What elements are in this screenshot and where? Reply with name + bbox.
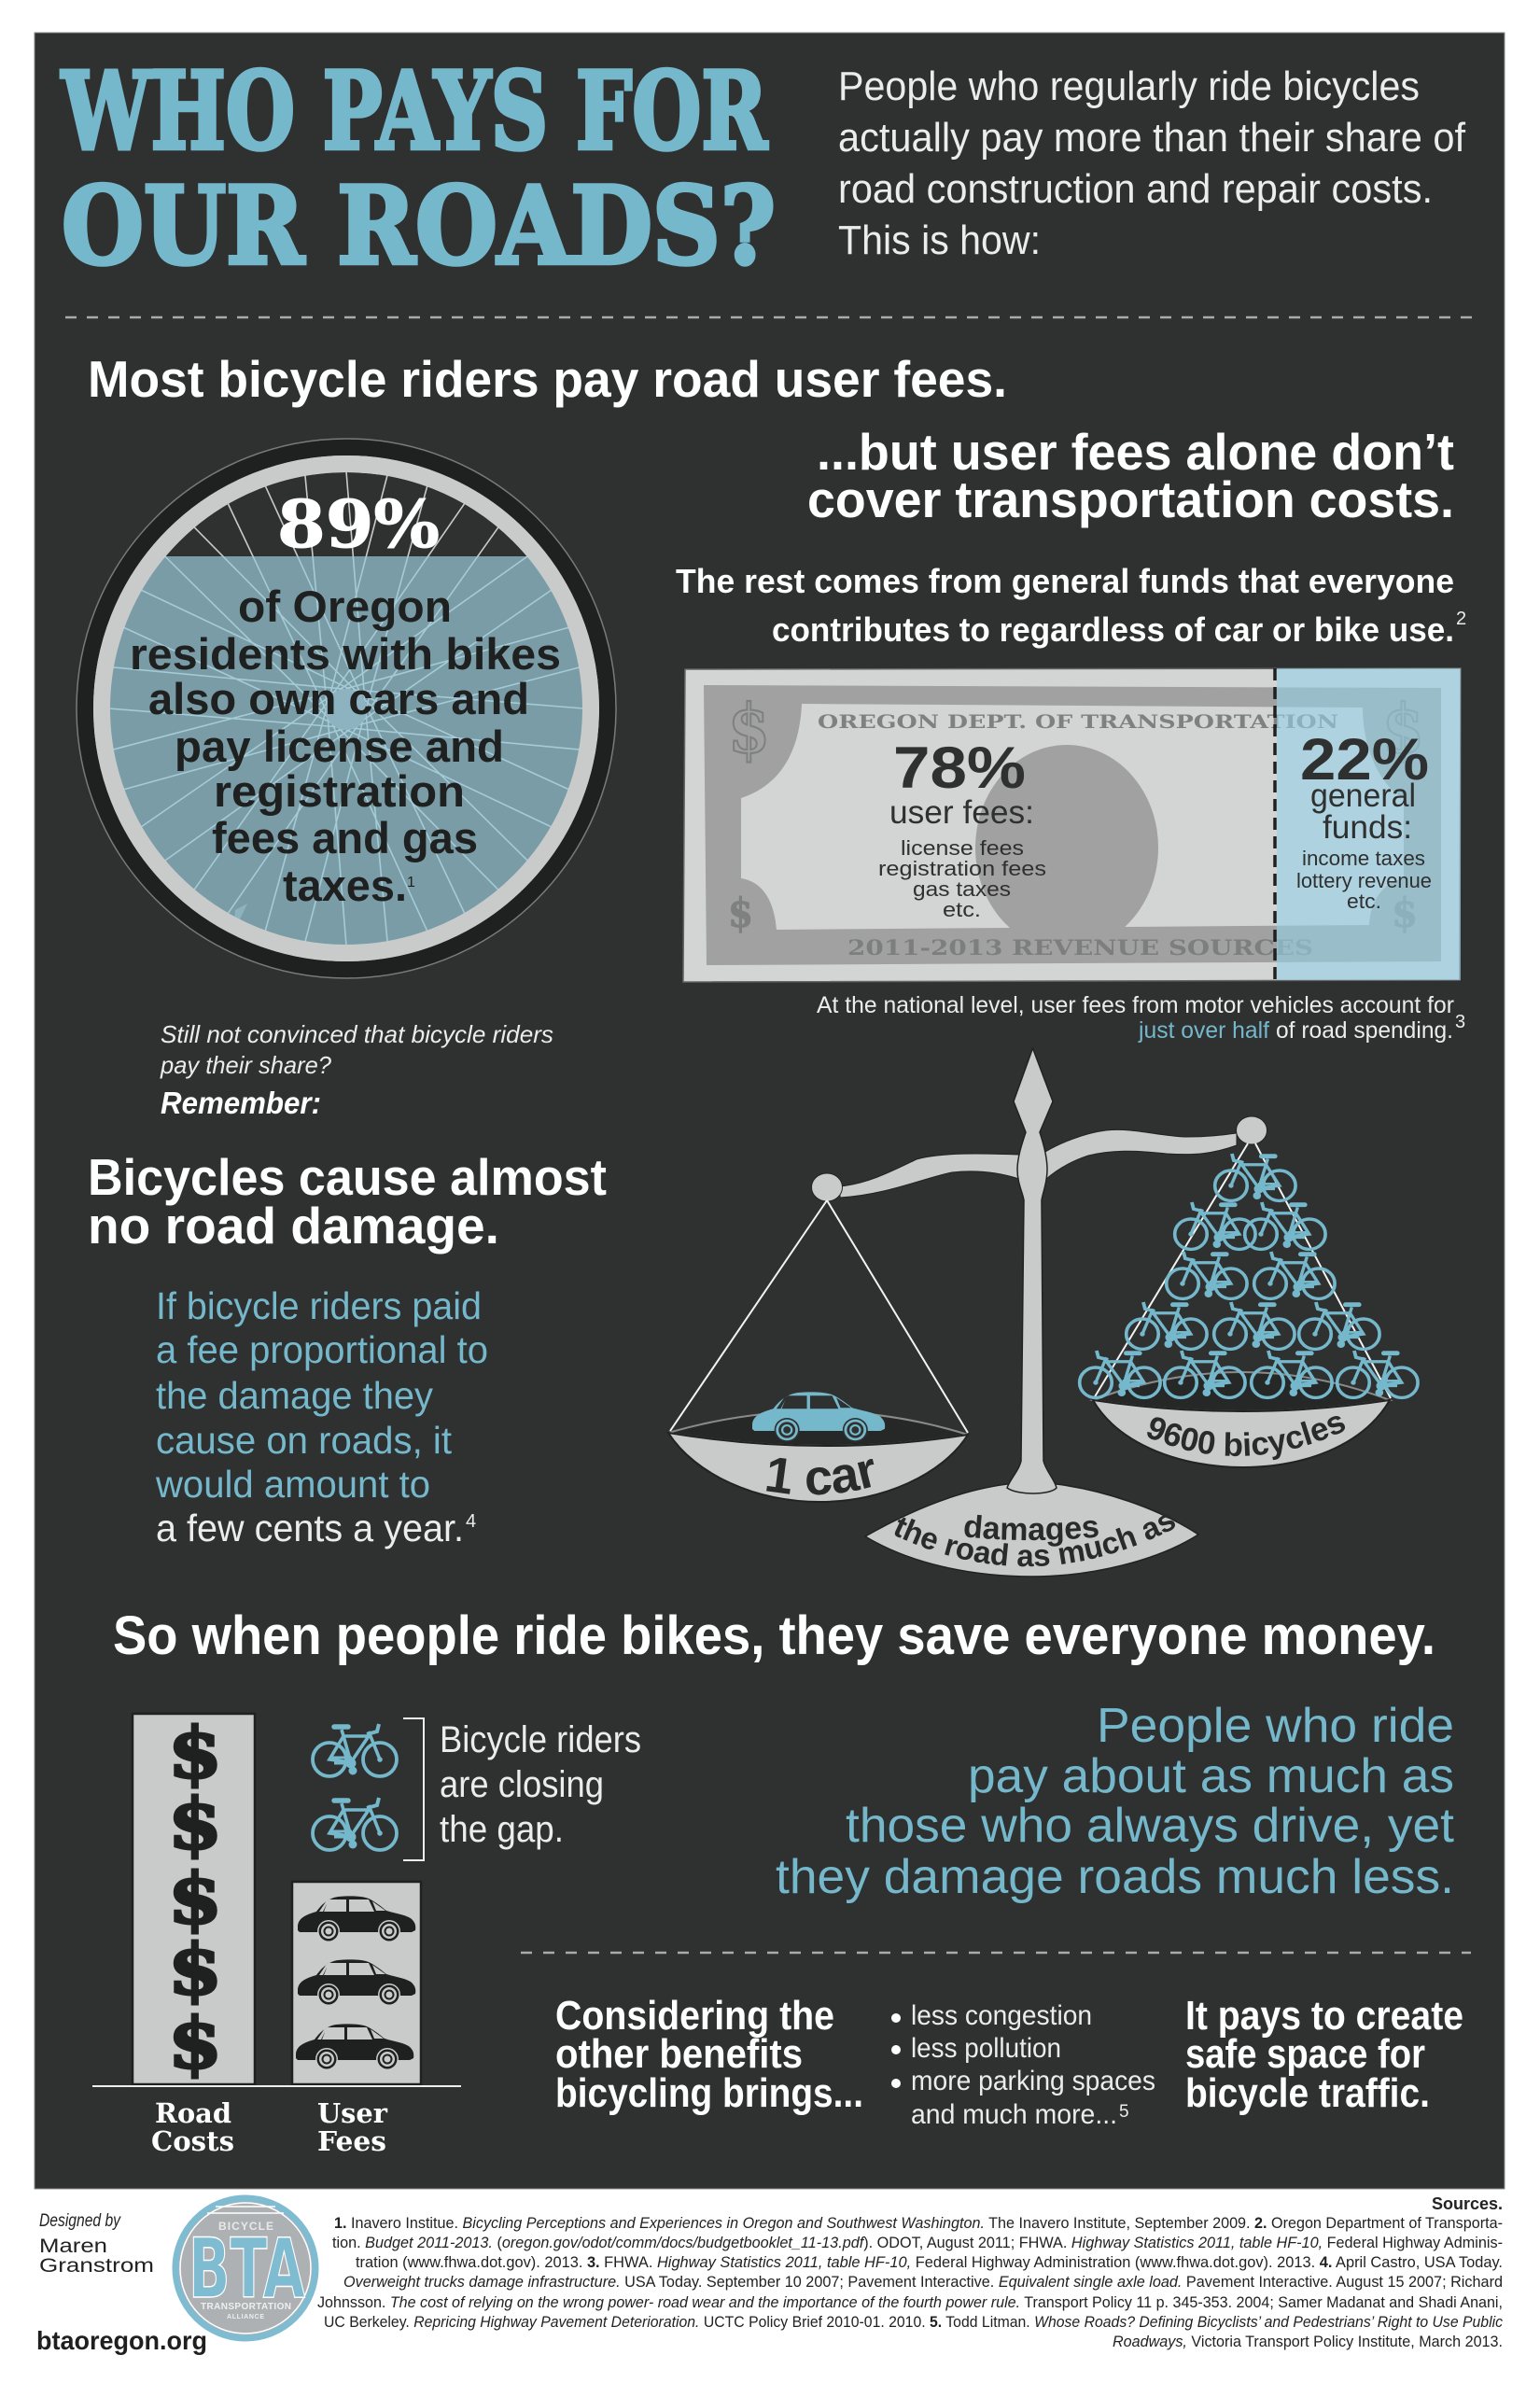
sources: Roadways, Victoria Transport Policy Institute, March 2013.	[1113, 2334, 1503, 2350]
list: other benefits	[891, 2000, 1155, 2130]
wheel caption	[130, 582, 561, 910]
text: proportional fee: would amount to	[155, 1463, 430, 1506]
website: btaoregon.org	[36, 2326, 207, 2355]
sources: Sources.	[1432, 2194, 1503, 2213]
designer credit: Granstrom	[39, 2255, 154, 2277]
icon: stacked dollars	[168, 1712, 222, 2084]
wheel caption: 1	[407, 875, 415, 890]
intro text: This is how:	[838, 217, 1041, 263]
designer credit: Maren	[39, 2236, 107, 2257]
left pan: 1 car	[666, 1200, 969, 1503]
89%: 89%	[277, 485, 440, 563]
icon: blue car	[752, 1392, 885, 1442]
right pan: 9600 bicycles	[1077, 1142, 1420, 1468]
left pan: 1 car: 1 car	[766, 1458, 874, 1495]
text: it pays: bicycle traffic.	[1185, 2070, 1430, 2116]
user fees share: etc.	[943, 898, 981, 921]
text: proportional fee	[155, 1284, 488, 1549]
general funds share: 22%	[1300, 727, 1429, 792]
general funds share: general	[1310, 778, 1416, 814]
general funds overlay	[1277, 668, 1461, 980]
callout: people who ride: those who always drive, yet	[846, 1799, 1455, 1853]
heading: road damage: Bicycles cause almost	[88, 1148, 607, 1206]
heading: user fees alone: ...but user fees alone don’t	[817, 423, 1454, 481]
heading: road damage	[88, 1148, 607, 1255]
heading: user fees alone	[807, 423, 1454, 528]
icon: bicycles closing gap	[313, 1724, 397, 1850]
sources	[317, 2194, 1504, 2350]
still not convinced note: Remember:	[161, 1086, 321, 1120]
user fees share: 78%	[893, 736, 1026, 801]
text: proportional fee: cause on roads, it	[156, 1419, 453, 1462]
intro text	[838, 63, 1466, 263]
right pan: 9600 bicycles: 9600 bicycles	[1147, 1416, 1346, 1460]
text: considering benefits: other benefits	[555, 2031, 803, 2077]
wheel: 89% statistic	[77, 439, 616, 978]
user fees share: gas taxes	[913, 877, 1011, 901]
bill footer: 2011-2013 REVENUE SOURCES	[847, 936, 1313, 960]
list: other benefits: more parking spaces	[911, 2066, 1155, 2096]
user fees share: user fees:	[889, 794, 1034, 831]
national level note: 3	[1455, 1012, 1465, 1032]
text: considering benefits: Considering the	[555, 1993, 834, 2039]
text: general funds	[676, 562, 1466, 649]
intro text: People who regularly ride bicycles	[838, 63, 1420, 109]
scale column	[1007, 1048, 1057, 1493]
general funds share: income taxes	[1302, 847, 1425, 870]
sources: Overweight trucks damage infrastructure. USA Today. September 10 2007; Pavement Interactive. Equivalent single axle load. Pavement Interactive. August 15 2007; Richard	[343, 2274, 1503, 2291]
bar chart: road costs vs user fees	[92, 1712, 461, 2157]
callout: people who ride: they damage roads much less.	[776, 1850, 1454, 1904]
wheel caption: of Oregon	[238, 582, 452, 631]
icon: stacked dollars: $	[168, 2002, 222, 2084]
title: OUR ROADS?	[62, 163, 776, 288]
icon: stacked dollars: $	[168, 1857, 222, 1940]
wheel caption: also own cars and	[148, 674, 529, 723]
text: proportional fee: a few cents a year.	[156, 1507, 464, 1549]
text: closing the gap: Bicycle riders	[440, 1719, 641, 1760]
text: proportional fee: the damage they	[156, 1374, 433, 1417]
general funds share: lottery revenue	[1296, 869, 1432, 892]
text: closing the gap: the gap.	[440, 1809, 564, 1850]
heading: most bicycle riders pay: Most bicycle riders pay road user fees.	[88, 350, 1007, 408]
icon: stacked dollars: $	[168, 1712, 222, 1794]
icon: dollar signs: $	[728, 689, 770, 768]
sources: Johnsson. The cost of relying on the wrong power- road wear and the importance of the fourth power rule. Transport Policy 11 p. 345-353. 2004; Samer Madanat and Shadi Anani,	[317, 2294, 1503, 2311]
designer credit	[39, 2211, 154, 2277]
sources: UC Berkeley. Repricing Highway Pavement Deterioration. UCTC Policy Brief 2010-01. 2010. 5. Todd Litman. Whose Roads? Defining Bicyclists’ and Pedestrians’ Right to Use Public	[324, 2314, 1504, 2331]
general funds share: etc.	[1347, 890, 1381, 913]
bracket	[403, 1718, 424, 1860]
title	[61, 49, 776, 288]
user fees share: license fees	[901, 836, 1024, 860]
national level note: of road spending.	[1276, 1017, 1453, 1044]
sources: tion. Budget 2011-2013. (oregon.gov/odot/comm/docs/budgetbooklet_11-13.pdf). ODOT, August 2011; FHWA. Highway Statistics 2011, table HF-10, Federal Highway Adminis-	[332, 2235, 1503, 2251]
user fees share: registration fees	[878, 857, 1046, 880]
logo: BTA: TRANSPORTATION	[201, 2302, 291, 2312]
general funds share	[1296, 727, 1432, 913]
text: general funds: 2	[1456, 609, 1466, 629]
scale base with caption	[864, 1484, 1199, 1577]
logo: BTA	[175, 2198, 315, 2338]
text: closing the gap: are closing	[440, 1764, 604, 1805]
bar: user fees	[292, 1882, 421, 2084]
axis labels: Road	[155, 2097, 231, 2129]
list: other benefits: and much more...	[911, 2099, 1117, 2130]
text: closing the gap	[440, 1719, 641, 1850]
axis labels	[151, 2097, 388, 2157]
sources: tration (www.fhwa.dot.gov). 2013. 3. FHWA. Highway Statistics 2011, table HF-10, Federal Highway Administration (www.fhwa.dot.gov). 2013. 4. April Castro, USA Today.	[356, 2254, 1503, 2271]
general funds share: funds:	[1323, 809, 1412, 846]
national level note: just over half	[1138, 1017, 1269, 1044]
text: it pays: It pays to create	[1185, 1993, 1463, 2039]
designer credit: Designed by	[39, 2211, 121, 2231]
text: proportional fee: 4	[466, 1511, 476, 1532]
wheel caption: registration	[214, 766, 465, 816]
wheel caption: taxes.	[283, 861, 407, 910]
text: proportional fee: a fee proportional to	[156, 1328, 488, 1371]
icon: dollar signs	[728, 689, 1424, 937]
wheel caption: pay license and	[175, 722, 504, 771]
bill heading: OREGON DEPT. OF TRANSPORTATION	[818, 710, 1338, 733]
icon: stacked dollars: $	[168, 1783, 222, 1865]
wheel caption: fees and gas	[212, 813, 478, 862]
balance scale	[666, 1047, 1420, 1577]
logo: BTA: BTA	[189, 2221, 305, 2317]
text: proportional fee: If bicycle riders paid	[156, 1284, 482, 1327]
icon: stacked cars	[296, 1896, 415, 2070]
intro text: road construction and repair costs.	[838, 166, 1433, 212]
list: other benefits: 5	[1119, 2102, 1129, 2122]
dollar bill: revenue sources	[683, 668, 1461, 982]
icon: dollar signs: $	[1382, 689, 1424, 768]
text: it pays	[1185, 1993, 1463, 2116]
icon: dollar signs: $	[1392, 890, 1418, 937]
still not convinced note: pay their share?	[160, 1051, 332, 1079]
logo: BTA: BICYCLE	[218, 2220, 273, 2233]
bar: road costs	[133, 1714, 255, 2084]
scale beam	[840, 1129, 1237, 1198]
axis labels: Fees	[317, 2125, 386, 2157]
callout: people who ride: People who ride	[1097, 1699, 1454, 1753]
icon: pile of bicycles	[1080, 1154, 1418, 1397]
national level note: At the national level, user fees from motor vehicles account for	[817, 992, 1454, 1018]
icon: stacked dollars: $	[168, 1928, 222, 2011]
national level note	[817, 992, 1465, 1044]
sources: 1. Inavero Institue. Bicycling Perceptions and Experiences in Oregon and Southwest Washington. The Inavero Institute, September 2009. 2. Oregon Department of Transporta-	[334, 2215, 1503, 2232]
axis labels: Costs	[151, 2125, 234, 2157]
text: it pays: safe space for	[1185, 2031, 1425, 2077]
wheel caption: residents with bikes	[130, 629, 561, 679]
scale base with caption: damages	[964, 1514, 1099, 1547]
icon: dollar signs: $	[728, 890, 753, 937]
text: considering benefits: bicycling brings...	[555, 2070, 863, 2116]
title: WHO PAYS FOR	[61, 49, 768, 174]
text: general funds: contributes to regardless of car or bike use.	[772, 610, 1454, 649]
list: other benefits: less congestion	[911, 2000, 1092, 2031]
user fees share	[878, 736, 1046, 921]
still not convinced note: Still not convinced that bicycle riders	[161, 1020, 553, 1048]
heading: user fees alone: cover transportation costs.	[807, 470, 1454, 528]
text: general funds: The rest comes from general funds that everyone	[676, 562, 1454, 600]
heading: road damage: no road damage.	[88, 1197, 499, 1255]
still not convinced note	[160, 1020, 553, 1120]
text: considering benefits	[555, 1993, 863, 2116]
heading: save everyone money: So when people ride bikes, they save everyone money.	[113, 1605, 1435, 1666]
list: other benefits: less pollution	[911, 2033, 1061, 2064]
callout: people who ride	[776, 1699, 1455, 1904]
axis labels: User	[317, 2097, 388, 2129]
intro text: actually pay more than their share of	[838, 115, 1466, 161]
callout: people who ride: pay about as much as	[968, 1749, 1454, 1803]
scale base with caption: the road as much as	[894, 1516, 1175, 1566]
logo: BTA: ALLIANCE	[227, 2314, 264, 2320]
